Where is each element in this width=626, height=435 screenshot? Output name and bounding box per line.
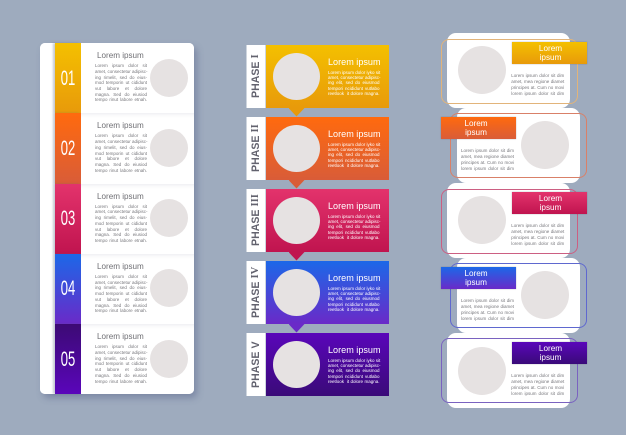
colour box <box>266 117 389 180</box>
phase label <box>247 117 266 180</box>
text block: Lorem ipsum dolor sit <box>95 204 147 209</box>
heading: Lorem ipsum <box>328 344 381 354</box>
image placeholder <box>150 129 188 167</box>
text block: magna. Sed do eiusiod <box>95 373 147 378</box>
outline <box>441 39 578 104</box>
white card <box>447 333 570 408</box>
text block: lorem ipsum dolor sit dim <box>461 316 514 321</box>
white card <box>447 183 570 258</box>
text block: lorem ipsum dolor sit dim <box>511 241 564 246</box>
text block: principes at. Cum no movi <box>511 235 564 240</box>
number tab 02: 02 <box>61 137 75 160</box>
text block <box>328 214 381 240</box>
text block: reetlook it dolore magna. <box>328 163 380 168</box>
text block <box>328 70 381 96</box>
banner: ipsum <box>465 128 487 137</box>
banner <box>512 42 587 64</box>
panel: card 3 <box>441 183 588 258</box>
text block: ing elit, sed do eiusmod <box>328 368 380 373</box>
banner: Lorem <box>539 44 562 53</box>
image placeholder <box>458 196 506 244</box>
text block: ing rimelit, sed do eius- <box>95 285 147 290</box>
banner: Lorem <box>464 119 488 128</box>
text block: Lorem ipsum dolor iyko sit <box>328 214 380 219</box>
text block <box>95 133 148 173</box>
phase label: PHASE I <box>250 55 262 98</box>
row 02 <box>52 112 194 185</box>
phase label <box>247 261 266 324</box>
banner: ipsum <box>465 278 487 287</box>
panel: card 2 <box>440 108 587 183</box>
phase label: PHASE III <box>250 195 262 246</box>
text block: amet, consectetur adipisc- <box>328 291 381 296</box>
text block: amet, consectetur adipisc- <box>95 69 148 74</box>
text block <box>511 73 564 96</box>
banner: Lorem <box>464 269 488 278</box>
panel: phase IV <box>246 261 389 332</box>
text block: Lorem ipsum dolor sit dim <box>461 298 514 303</box>
text block: amet, mea regione diamet <box>511 379 564 384</box>
text block: mod temporin ut cididunt <box>95 291 147 296</box>
text block: Lorem ipsum dolor iyko sit <box>328 142 380 147</box>
number tab 05 <box>55 324 81 394</box>
text block: reetlook it dolore magna. <box>328 307 380 312</box>
text block: principes at. Cum no movi <box>511 85 564 90</box>
text block: vut labore et dolore <box>95 297 147 302</box>
text block: vut labore et dolore <box>95 86 147 91</box>
heading: Lorem ipsum <box>328 56 381 66</box>
row 05 content <box>81 324 194 394</box>
text block: magna. Sed do eiusiod <box>95 303 147 308</box>
row 04 <box>52 253 194 325</box>
text block: ing rimelit, sed do eius- <box>95 356 147 361</box>
text block: mod temporin ut cididunt <box>95 80 147 85</box>
text block: Lorem ipsum dolor sit <box>95 344 147 349</box>
outline <box>441 338 578 403</box>
panel: card 4 <box>440 258 587 333</box>
arrow pointer <box>288 180 304 188</box>
banner <box>512 342 587 364</box>
left white strip <box>40 43 55 394</box>
text block: principes at. Cum no movi <box>461 160 514 165</box>
text block: Lorem ipsum dolor iyko sit <box>328 358 380 363</box>
outline <box>450 113 587 178</box>
text block <box>95 344 148 384</box>
text block: Lorem ipsum dolor iyko sit <box>328 286 380 291</box>
number tab 03 <box>55 184 81 254</box>
text block: Lorem ipsum dolor sit dim <box>511 373 564 378</box>
phase label <box>247 45 266 108</box>
text block: amet, consectetur adipisc- <box>328 147 381 152</box>
text block: reetlook it dolore magna. <box>328 91 380 96</box>
row 01 content <box>81 43 194 113</box>
text block: tempori ncididunt vutlabo <box>328 302 380 307</box>
text block: lorem ipsum dolor sit dim <box>461 166 514 171</box>
row 05 <box>52 323 194 394</box>
heading: Lorem ipsum <box>328 272 381 282</box>
text block: tempo rinut labore etnah. <box>95 97 147 102</box>
text block <box>328 286 381 312</box>
panel: phase III <box>246 189 389 260</box>
text block: amet, mea regione diamet <box>461 154 514 159</box>
colour box <box>266 189 389 252</box>
text block: ing rimelit, sed do eius- <box>95 145 147 150</box>
text block: mod temporin ut cididunt <box>95 221 147 226</box>
row 02 content <box>81 113 194 183</box>
image placeholder <box>521 271 569 319</box>
text block <box>95 204 148 243</box>
row 03 <box>52 183 194 255</box>
number tab 04 <box>55 254 81 324</box>
outline <box>441 189 578 254</box>
banner: ipsum <box>540 53 561 62</box>
number tab 04: 04 <box>61 277 75 300</box>
text block: amet, consectetur adipisc- <box>95 280 148 285</box>
heading: Lorem ipsum <box>97 51 144 60</box>
number tab 05: 05 <box>61 348 75 371</box>
banner: Lorem <box>539 344 562 353</box>
text block: ing elit, sed do eiusmod <box>328 296 380 301</box>
text block: ing rimelit, sed do eius- <box>95 75 147 80</box>
text block: amet, mea regione diamet <box>511 79 564 84</box>
white card <box>457 108 580 183</box>
image placeholder <box>273 341 320 388</box>
text block: ing elit, sed do eiusmod <box>328 80 380 85</box>
text block: tempori ncididunt vutlabo <box>328 86 380 91</box>
phase label: PHASE IV <box>250 267 262 318</box>
text block: amet, consectetur adipisc- <box>95 350 148 355</box>
text block: reetlook it dolore magna. <box>328 235 380 240</box>
banner: Lorem <box>539 194 562 203</box>
banner <box>441 117 516 138</box>
text block <box>461 148 514 171</box>
text block: mod temporin ut cididunt <box>95 151 147 156</box>
image placeholder <box>150 340 188 378</box>
text block: Lorem ipsum dolor sit dim <box>511 73 564 78</box>
number tab 03: 03 <box>61 207 75 230</box>
row 03 content <box>81 184 194 254</box>
text block: vut labore et dolore <box>95 156 147 161</box>
text block <box>95 63 148 102</box>
image placeholder <box>273 269 320 316</box>
arrow pointer <box>288 108 304 116</box>
image placeholder <box>150 58 188 96</box>
text block: lorem ipsum dolor sit dim <box>511 391 564 396</box>
text block: tempo rinut labore etnah. <box>95 379 147 384</box>
colour box <box>266 333 389 396</box>
text block: reetlook it dolore magna. <box>328 379 380 384</box>
text block <box>511 373 564 396</box>
text block: tempo rinut labore etnah. <box>95 168 147 173</box>
text block: amet, consectetur adipisc- <box>328 219 381 224</box>
banner <box>441 267 516 288</box>
image placeholder <box>458 347 506 395</box>
arrow pointer <box>288 324 304 332</box>
text block: ing elit, sed do eiusmod <box>328 152 380 157</box>
text block <box>328 142 381 168</box>
image placeholder <box>273 125 320 172</box>
number tab 01: 01 <box>61 66 75 90</box>
text block: Lorem ipsum dolor iyko sit <box>328 70 380 75</box>
text block: amet, consectetur adipisc- <box>95 209 148 214</box>
row 01 <box>52 42 194 114</box>
phase label: PHASE V <box>250 341 262 388</box>
heading: Lorem ipsum <box>97 192 144 201</box>
text block <box>95 274 148 313</box>
text block: Lorem ipsum dolor sit <box>95 63 147 68</box>
heading: Lorem ipsum <box>97 332 144 341</box>
text block: principes at. Cum no movi <box>461 310 514 315</box>
heading: Lorem ipsum <box>328 200 381 210</box>
text block: magna. Sed do eiusiod <box>95 162 147 167</box>
text block: amet, consectetur adipisc- <box>95 139 148 144</box>
text block: amet, mea regione diamet <box>511 229 564 234</box>
colour box <box>266 261 389 324</box>
image placeholder <box>273 53 320 100</box>
text block <box>461 298 514 321</box>
text block: magna. Sed do eiusiod <box>95 232 147 237</box>
text block: tempo rinut labore etnah. <box>95 238 147 243</box>
text block: Lorem ipsum dolor sit <box>95 274 147 279</box>
text block: vut labore et dolore <box>95 367 147 372</box>
panel: numbered list <box>40 43 194 394</box>
number tab 02 <box>55 113 81 184</box>
text block: tempori ncididunt vutlabo <box>328 374 380 379</box>
phase label <box>247 189 266 252</box>
image placeholder <box>273 197 320 244</box>
text block: mod temporin ut cididunt <box>95 361 147 366</box>
text block: ing elit, sed do eiusmod <box>328 224 380 229</box>
heading: Lorem ipsum <box>328 128 381 138</box>
panel: phase I <box>246 45 389 116</box>
white card <box>447 33 570 108</box>
text block: principes at. Cum no movi <box>511 385 564 390</box>
text block: amet, consectetur adipisc- <box>328 75 381 80</box>
panel: phase II <box>246 117 389 188</box>
text block: lorem ipsum dolor sit dim <box>511 91 564 96</box>
text block: tempo rinut labore etnah. <box>95 308 147 313</box>
text block: amet, consectetur adipisc- <box>328 363 381 368</box>
image placeholder <box>458 46 506 94</box>
text block: amet, mea regione diamet <box>461 304 514 309</box>
text block: Lorem ipsum dolor sit dim <box>511 223 564 228</box>
arrow pointer <box>288 252 304 260</box>
text block <box>511 223 564 246</box>
text block: vut labore et dolore <box>95 227 147 232</box>
outline <box>450 263 587 328</box>
phase label <box>247 333 266 396</box>
text block: magna. Sed do eiusiod <box>95 92 147 97</box>
colour box <box>266 45 389 108</box>
row 04 content <box>81 254 194 324</box>
panel: card 1 <box>441 33 588 108</box>
text block <box>328 358 381 384</box>
text block: tempori ncididunt vutlabo <box>328 230 380 235</box>
number tab 01 <box>55 43 81 113</box>
white card <box>457 258 580 333</box>
panel: card 5 <box>441 333 588 408</box>
banner: ipsum <box>540 353 561 362</box>
text block: tempori ncididunt vutlabo <box>328 158 380 163</box>
image placeholder <box>150 269 188 307</box>
banner: ipsum <box>540 203 561 212</box>
heading: Lorem ipsum <box>97 121 144 130</box>
banner <box>512 192 587 214</box>
image placeholder <box>521 121 569 169</box>
heading: Lorem ipsum <box>97 262 144 271</box>
phase label: PHASE II <box>250 125 262 172</box>
panel: phase V <box>246 333 389 396</box>
text block: Lorem ipsum dolor sit dim <box>461 148 514 153</box>
image placeholder <box>150 199 188 237</box>
text block: ing rimelit, sed do eius- <box>95 215 147 220</box>
text block: Lorem ipsum dolor sit <box>95 133 147 138</box>
